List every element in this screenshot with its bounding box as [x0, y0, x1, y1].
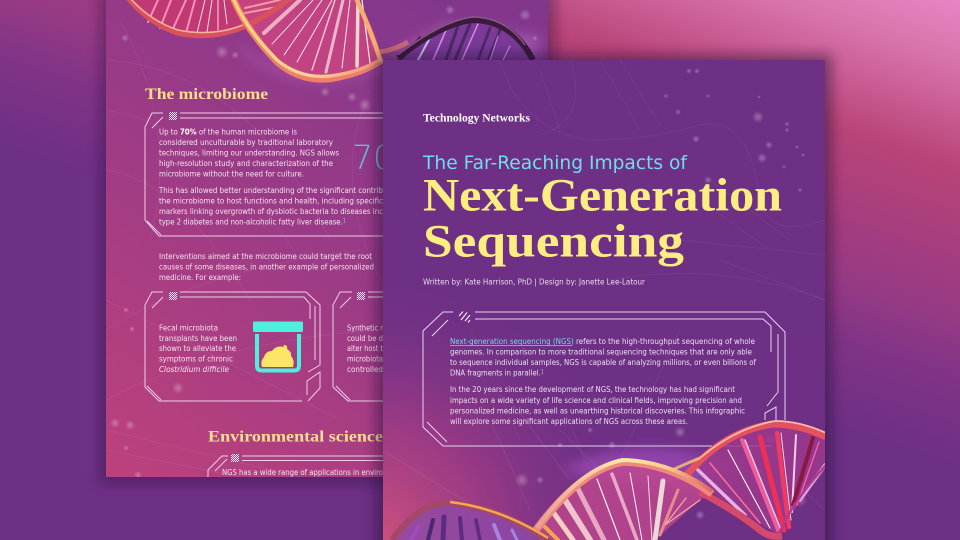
panel: introduction frame	[423, 312, 785, 446]
icon: hatch marker	[169, 112, 177, 120]
text: NGS definition	[450, 336, 757, 378]
text: fecal card: shown to alleviate the	[159, 343, 236, 353]
text: microbiome paragraph two	[158, 185, 383, 226]
title: Sequencing	[423, 216, 685, 268]
rungs dark	[402, 24, 510, 60]
faint DNA watermark	[470, 60, 825, 460]
text: environmental intro: NGS has a wide range of applications in enviro	[222, 467, 383, 477]
text: microbiome paragraph one: microbiome without the need for culture.	[159, 168, 304, 178]
text: NGS definition: genomes. In comparison to more traditional sequencing techniques that are only able	[450, 346, 752, 356]
text: synthetic card: alter host t	[347, 343, 384, 353]
text: NGS impact	[450, 384, 745, 426]
text: microbiome paragraph one: Up to 70% of the human microbiome is	[159, 126, 297, 136]
text: NGS definition: DNA fragments in parallel.	[450, 368, 559, 378]
text: microbiome paragraph one	[159, 126, 339, 178]
stat: 70 percent: 70%	[352, 138, 425, 177]
icon: sample jar	[253, 322, 303, 370]
text: interventions	[159, 251, 374, 282]
text: NGS definition: Next-generation sequencing (NGS) refers to the high-throughput sequencing of whole	[450, 336, 755, 346]
text: synthetic card: controlled	[347, 364, 383, 374]
icon: DNA helix, top	[128, 0, 540, 83]
text: NGS impact: In the 20 years since the development of NGS, the technology has had significant	[450, 384, 736, 394]
text: NGS definition: to sequence individual samples, NGS is capable of analyzing millions, or even billions of	[450, 357, 757, 367]
text: NGS definition: 1	[541, 368, 544, 376]
text: synthetic card: microbiota	[347, 354, 383, 364]
panel: front page	[376, 54, 832, 540]
strands	[128, 0, 293, 35]
text: fecal card: Clostridium difficile	[159, 364, 229, 374]
panel: synthetic microbiota card	[332, 292, 383, 402]
text: NGS impact: will explore some significant applications of NGS across these areas.	[450, 416, 688, 426]
rungs	[411, 517, 517, 540]
panel: microbiome text frame	[144, 112, 383, 236]
byline: Written by: Kate Harrison, PhD | Design by: Janette Lee-Latour	[423, 276, 646, 286]
text: NGS impact: personalized medicine, as well as unearthing historical discoveries. This infographic	[450, 406, 745, 416]
panel: fecal microbiota card	[145, 292, 320, 401]
text: microbiome paragraph two: 1	[343, 218, 346, 224]
title: Next-Generation	[423, 170, 782, 222]
faint network lines	[106, 20, 410, 477]
text: microbiome paragraph two: type 2 diabetes and non-alcoholic fatty liver disease.	[159, 216, 376, 226]
text: microbiome paragraph one: high-resolution study and characterization of the	[159, 158, 333, 168]
text: microbiome paragraph two: markers linking overgrowth of dysbiotic bacteria to diseases inc	[159, 206, 383, 216]
heading: Environmental science: Environmental science	[208, 428, 383, 446]
rungs top-left	[148, 0, 282, 33]
heading: The microbiome: The microbiome	[145, 86, 268, 103]
title	[423, 170, 782, 268]
text: microbiome paragraph one: considered unculturable by traditional laboratory	[159, 137, 333, 147]
text: fecal card: symptoms of chronic	[159, 354, 233, 364]
text: synthetic card	[347, 322, 384, 374]
text: interventions: Interventions aimed at the microbiome could target the root	[159, 251, 373, 261]
text: interventions: medicine. For example:	[159, 272, 241, 282]
text: fecal card: Fecal microbiota	[159, 322, 218, 332]
text: synthetic card: could be d	[347, 333, 383, 343]
text: microbiome paragraph two: the microbiome to host functions and health, including specific	[159, 196, 383, 206]
sparkles	[110, 5, 538, 479]
sparkles	[515, 68, 807, 520]
text: microbiome paragraph one: techniques, limiting our understanding. NGS allows	[159, 148, 339, 158]
logo: Technology Networks: Technology Networks	[423, 110, 530, 124]
rungs centre	[264, 0, 370, 72]
text: fecal card: transplants have been	[159, 333, 237, 343]
text: interventions: causes of some diseases, in another example of personalized	[159, 262, 374, 272]
strands	[392, 503, 550, 540]
heading: subtitle: The Far-Reaching Impacts of	[422, 152, 688, 174]
icon: DNA helix, bottom	[392, 421, 826, 540]
text: microbiome paragraph two: This has allowed better understanding of the significant contrib	[158, 185, 383, 195]
panel: environmental frame	[208, 454, 383, 477]
panel: back page	[100, 0, 556, 484]
text: NGS impact: impacts on a wide variety of life science and clinical fields, improving precision and	[450, 395, 742, 405]
faint radial lines	[385, 400, 825, 510]
icon: hatch marker	[459, 312, 470, 322]
text: fecal card	[159, 322, 237, 374]
text: synthetic card: Synthetic r	[347, 322, 384, 332]
